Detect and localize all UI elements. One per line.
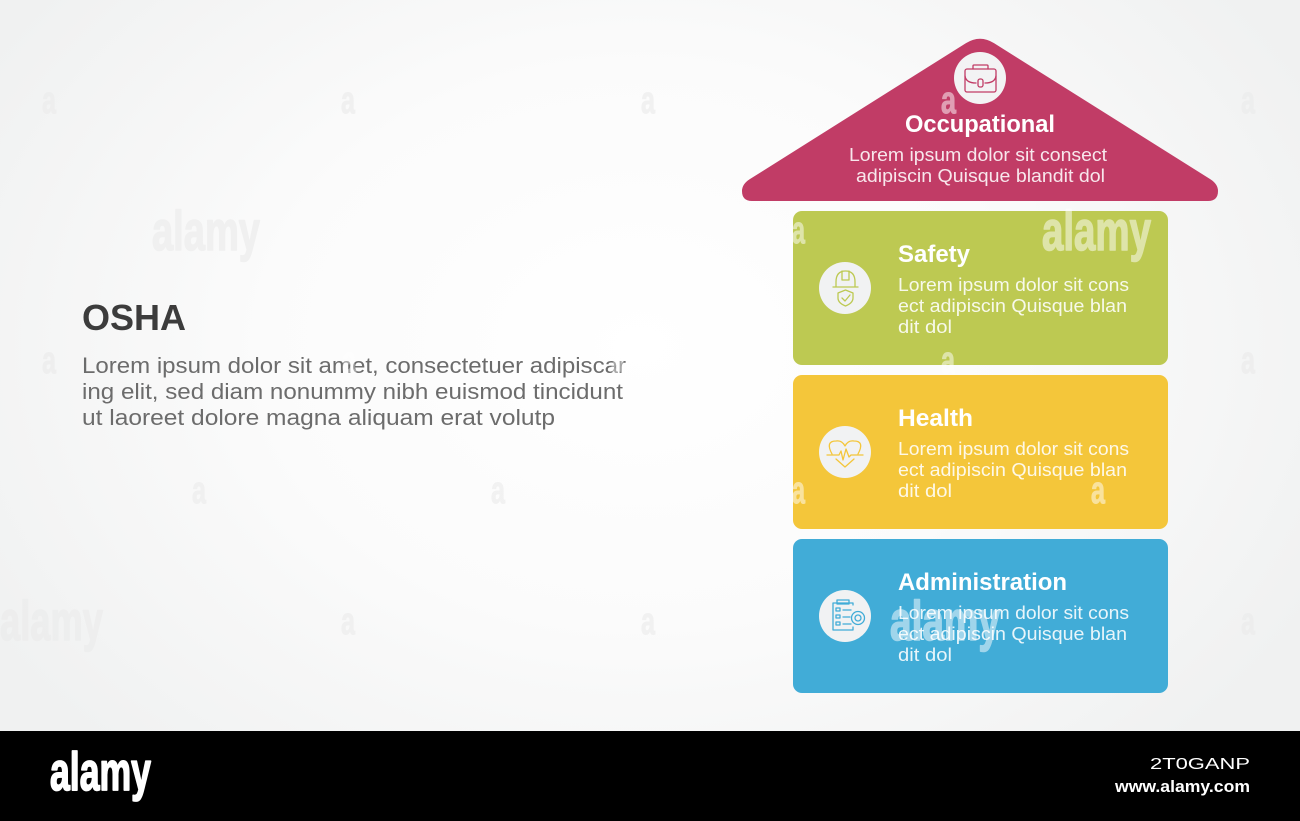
watermarks on white background: a [42, 80, 57, 122]
card background [793, 375, 1168, 529]
description: safety: ect adipiscin Quisque blan [898, 295, 1127, 316]
watermarks on coloured panels: alamy [890, 589, 1000, 652]
description text: Lorem ipsum dolor sit amet, consectetuer adipiscar [82, 353, 626, 378]
panel: health [793, 375, 1168, 529]
watermarks on white background: alamy [0, 589, 103, 652]
watermarks on white background: a [641, 601, 656, 643]
heading: OSHA: OSHA [82, 297, 186, 338]
website: www.alamy.com [1114, 777, 1250, 796]
watermarks on coloured panels: alamy [1042, 199, 1151, 262]
watermarks fading left text: a [611, 340, 626, 382]
watermarks on coloured panels: a [792, 470, 806, 512]
panel: administration [793, 539, 1168, 693]
heading: Safety: Safety [898, 241, 971, 268]
watermarks on white background: a [42, 340, 57, 382]
description: safety [898, 274, 1129, 337]
watermarks on white background [0, 80, 1256, 652]
description: safety: Lorem ipsum dolor sit cons [898, 274, 1129, 295]
watermarks on white background: a [341, 80, 356, 122]
watermarks on white background: a [1241, 340, 1256, 382]
image id: 2T0GANP [1150, 756, 1250, 773]
heading: Health: Health [898, 405, 973, 432]
icon: heart with pulse [819, 426, 871, 478]
watermark overlay [0, 80, 1256, 652]
description text: ing elit, sed diam nonummy nibh euismod tincidunt [82, 379, 623, 404]
description: administration: Lorem ipsum dolor sit cons [898, 602, 1129, 623]
panel: safety [793, 211, 1168, 365]
watermarks on coloured panels [792, 80, 1151, 652]
description: safety: dit dol [898, 316, 952, 337]
watermarks fading left text [342, 340, 626, 382]
roof shape [742, 39, 1218, 201]
watermarks on coloured panels: a [792, 210, 806, 252]
watermarks fading left text: a [342, 340, 357, 382]
panel: occupational roof [742, 39, 1218, 201]
description: administration: dit dol [898, 644, 952, 665]
watermarks on coloured panels: a [1091, 470, 1106, 512]
description text [82, 353, 626, 430]
description: administration: ect adipiscin Quisque blan [898, 623, 1127, 644]
description: occupational [849, 144, 1107, 186]
description: occupational: adipiscin Quisque blandit dol [856, 165, 1105, 186]
heading: Administration: Administration [898, 569, 1067, 596]
description: health: dit dol [898, 480, 952, 501]
watermarks on white background: a [341, 601, 356, 643]
watermarks on white background: a [641, 80, 656, 122]
description text: ut laoreet dolore magna aliquam erat volutp [82, 405, 555, 430]
card background [793, 539, 1168, 693]
card background [793, 211, 1168, 365]
watermarks on coloured panels: a [941, 340, 956, 382]
heading: Occupational: Occupational [905, 111, 1055, 138]
watermarks on white background: alamy [152, 199, 260, 262]
description: health [898, 438, 1129, 501]
watermarks on white background: a [1241, 80, 1256, 122]
footer bar [0, 731, 1300, 821]
left text block [82, 297, 626, 430]
watermarks on white background: a [192, 470, 207, 512]
watermarks on white background: a [1241, 601, 1256, 643]
description: health: Lorem ipsum dolor sit cons [898, 438, 1129, 459]
icon: clipboard and gear [819, 590, 871, 642]
watermarks on white background: a [491, 470, 506, 512]
description: occupational: Lorem ipsum dolor sit consect [849, 144, 1107, 165]
description: health: ect adipiscin Quisque blan [898, 459, 1127, 480]
watermarks on coloured panels: a [941, 80, 957, 122]
description: administration [898, 602, 1129, 665]
icon: briefcase [954, 52, 1006, 104]
icon: hard hat and shield [819, 262, 871, 314]
alamy logo: alamy [50, 742, 151, 802]
